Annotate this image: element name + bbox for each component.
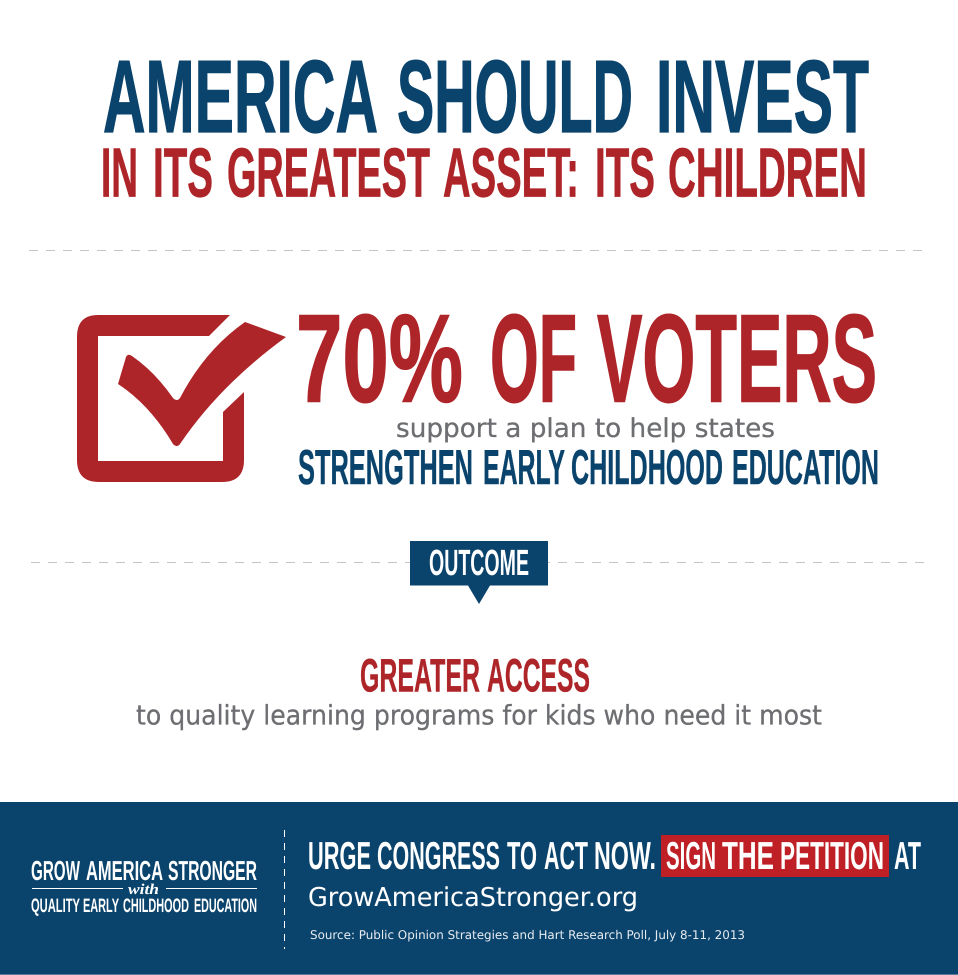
callout: outcome: OUTCOME: [429, 542, 529, 583]
title: AMERICA: [103, 39, 378, 154]
panel: footer: [0, 802, 958, 975]
text: strengthen early childhood education: STRENGTHEN: [298, 441, 473, 495]
call to action: NOW.: [594, 835, 656, 878]
heading: greater access: GREATER: [360, 648, 480, 702]
icon: checkbox with check mark: [77, 315, 286, 482]
headline: 70% of voters: [296, 290, 877, 428]
call to action: AT: [894, 835, 921, 878]
call to action: PETITION: [780, 835, 884, 878]
text: support a plan: support a plan to help states: [396, 414, 775, 444]
text: strengthen early childhood education: EARLY: [483, 441, 565, 495]
link: website: GrowAmericaStronger.org: [308, 883, 638, 913]
call to action: [308, 835, 921, 878]
text: quality learning programs: to quality learning programs for kids who need it most: [136, 700, 822, 732]
logo: grow america stronger: EARLY: [83, 895, 119, 917]
call to action: TO: [507, 835, 537, 878]
headline: 70% of voters: OF: [490, 290, 577, 428]
headline: 70% of voters: 70%: [296, 290, 463, 428]
source note: Source: Public Opinion Strategies and Hart Research Poll, July 8-11, 2013: [310, 928, 745, 942]
logo: grow america stronger: GROW: [31, 855, 80, 886]
logo: grow america stronger: STRONGER: [168, 855, 257, 886]
title: GREATEST: [227, 134, 430, 212]
callout: outcome: [410, 541, 548, 604]
text: strengthen early childhood education: [298, 441, 879, 495]
title: ITS: [595, 134, 655, 212]
title: ITS: [153, 134, 213, 212]
title: SHOULD: [397, 39, 633, 154]
logo: grow america stronger: AMERICA: [86, 855, 163, 886]
call to action: SIGN: [666, 835, 716, 878]
title: [101, 39, 869, 212]
logo: grow america stronger: QUALITY: [31, 895, 80, 917]
call to action: THE: [722, 835, 774, 878]
heading: greater access: ACCESS: [487, 648, 590, 702]
text: strengthen early childhood education: CHILDHOOD: [571, 441, 723, 495]
call to action: URGE: [308, 835, 371, 878]
logo: grow america stronger: EDUCATION: [194, 895, 257, 917]
call to action: CONGRESS: [377, 835, 500, 878]
logo: grow america stronger: with: [128, 882, 159, 898]
title: ASSET:: [443, 134, 579, 212]
call to action: ACT: [544, 835, 588, 878]
logo: grow america stronger: [31, 855, 257, 917]
logo: grow america stronger: CHILDHOOD: [123, 895, 189, 917]
title: IN: [101, 134, 138, 212]
